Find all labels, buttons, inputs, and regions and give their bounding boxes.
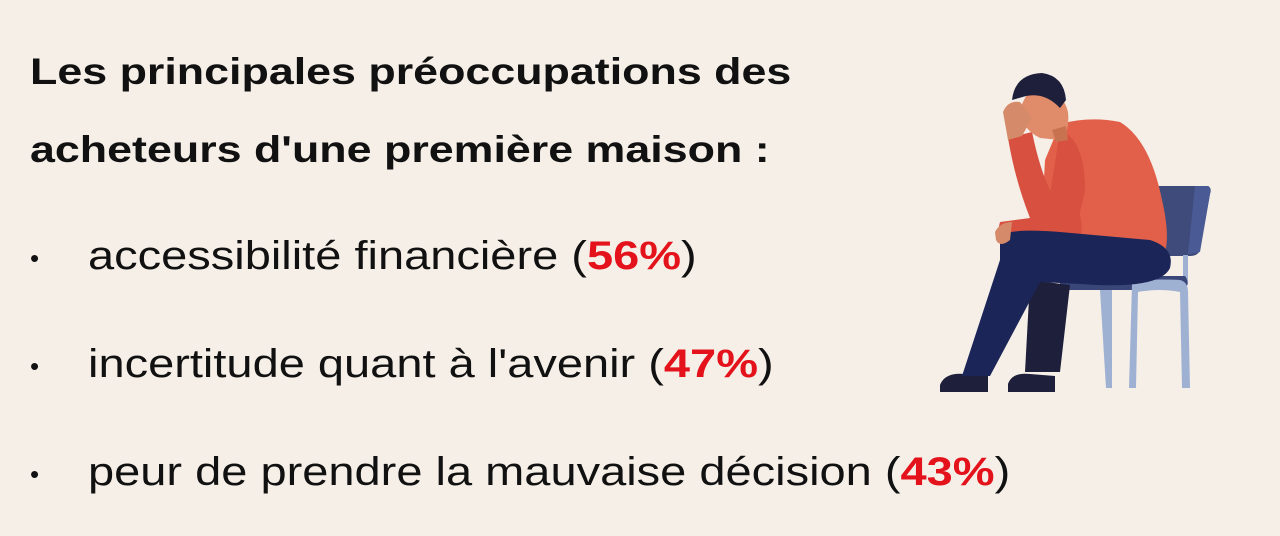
bullet 2: • — [30, 351, 39, 381]
front leg — [962, 231, 1171, 376]
title — [30, 51, 791, 170]
title: acheteurs d'une première maison : — [30, 129, 770, 170]
torso — [1040, 119, 1167, 252]
back leg — [1025, 280, 1070, 372]
head — [1003, 73, 1068, 142]
shoes — [940, 374, 988, 392]
bullet 3: • — [30, 459, 39, 489]
chair — [1060, 186, 1211, 388]
title: Les principales préoccupations des — [30, 51, 791, 92]
knee hand — [995, 222, 1012, 244]
bullet 1: accessibilité financière (56%) — [88, 234, 697, 278]
arm — [999, 132, 1082, 242]
bullet 3: peur de prendre la mauvaise décision (43%) — [88, 450, 1010, 494]
bullet 1: • — [30, 243, 39, 273]
bullet 2: incertitude quant à l'avenir (47%) — [88, 342, 774, 386]
